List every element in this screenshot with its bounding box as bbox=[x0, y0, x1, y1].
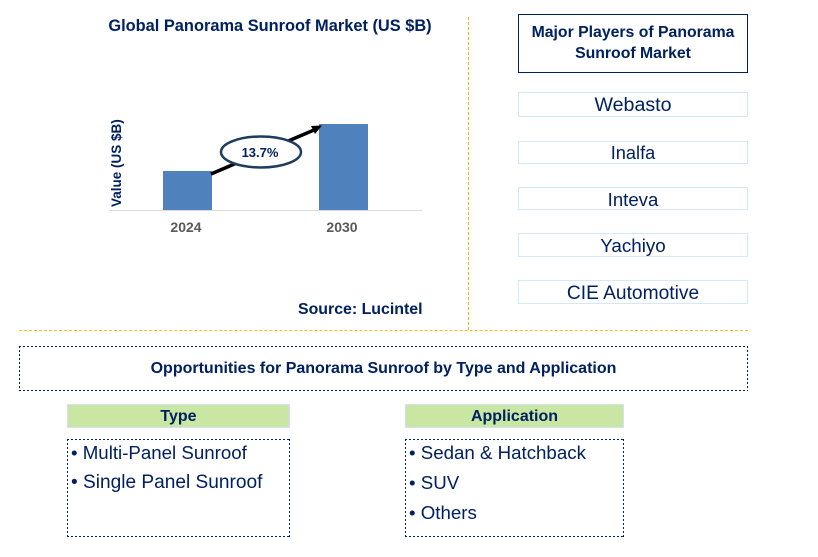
CAGR ellipse bbox=[221, 136, 301, 168]
application list: • Sedan & Hatchback bbox=[409, 442, 586, 463]
player: Yachiyo bbox=[518, 233, 748, 257]
x label 2024: 2024 bbox=[170, 219, 202, 235]
player: CIE Automotive bbox=[518, 280, 748, 304]
player: Inalfa: Inalfa bbox=[611, 143, 655, 163]
application list: • SUV bbox=[409, 472, 459, 493]
vertical divider bbox=[468, 17, 469, 330]
type list: • Single Panel Sunroof bbox=[71, 472, 262, 493]
players heading: Sunroof Market bbox=[575, 45, 691, 62]
player: Webasto bbox=[518, 92, 748, 117]
player: Inalfa bbox=[518, 141, 748, 164]
player: CIE Automotive: CIE Automotive bbox=[567, 283, 699, 304]
players heading: Major Players of Panorama bbox=[532, 24, 734, 41]
type list bbox=[67, 439, 290, 537]
bar 2024 bbox=[163, 171, 212, 210]
application heading bbox=[405, 404, 624, 428]
bar chart bbox=[109, 119, 422, 211]
player: Webasto: Webasto bbox=[595, 94, 671, 116]
player: Yachiyo: Yachiyo bbox=[600, 235, 666, 256]
players heading bbox=[518, 14, 748, 73]
source: Source: Lucintel bbox=[298, 301, 422, 318]
CAGR ellipse: 13.7% bbox=[242, 145, 279, 160]
player: Inteva bbox=[518, 187, 748, 210]
player: Inteva: Inteva bbox=[608, 189, 658, 210]
horizontal divider bbox=[19, 330, 748, 331]
application list bbox=[405, 439, 624, 537]
type heading: Type bbox=[160, 408, 197, 425]
opportunities heading bbox=[19, 346, 748, 391]
type heading bbox=[67, 404, 290, 428]
application list: • Others bbox=[409, 502, 477, 523]
y-axis label: Value (US $B) bbox=[109, 119, 124, 207]
application heading: Application bbox=[471, 408, 558, 425]
growth arrow bbox=[211, 126, 322, 174]
x label 2030: 2030 bbox=[326, 219, 358, 235]
opportunities heading: Opportunities for Panorama Sunroof by Type and Application bbox=[151, 360, 616, 377]
bar 2030 bbox=[319, 124, 368, 210]
chart title: Global Panorama Sunroof Market (US $B) bbox=[108, 17, 432, 35]
type list: • Multi-Panel Sunroof bbox=[71, 442, 247, 463]
